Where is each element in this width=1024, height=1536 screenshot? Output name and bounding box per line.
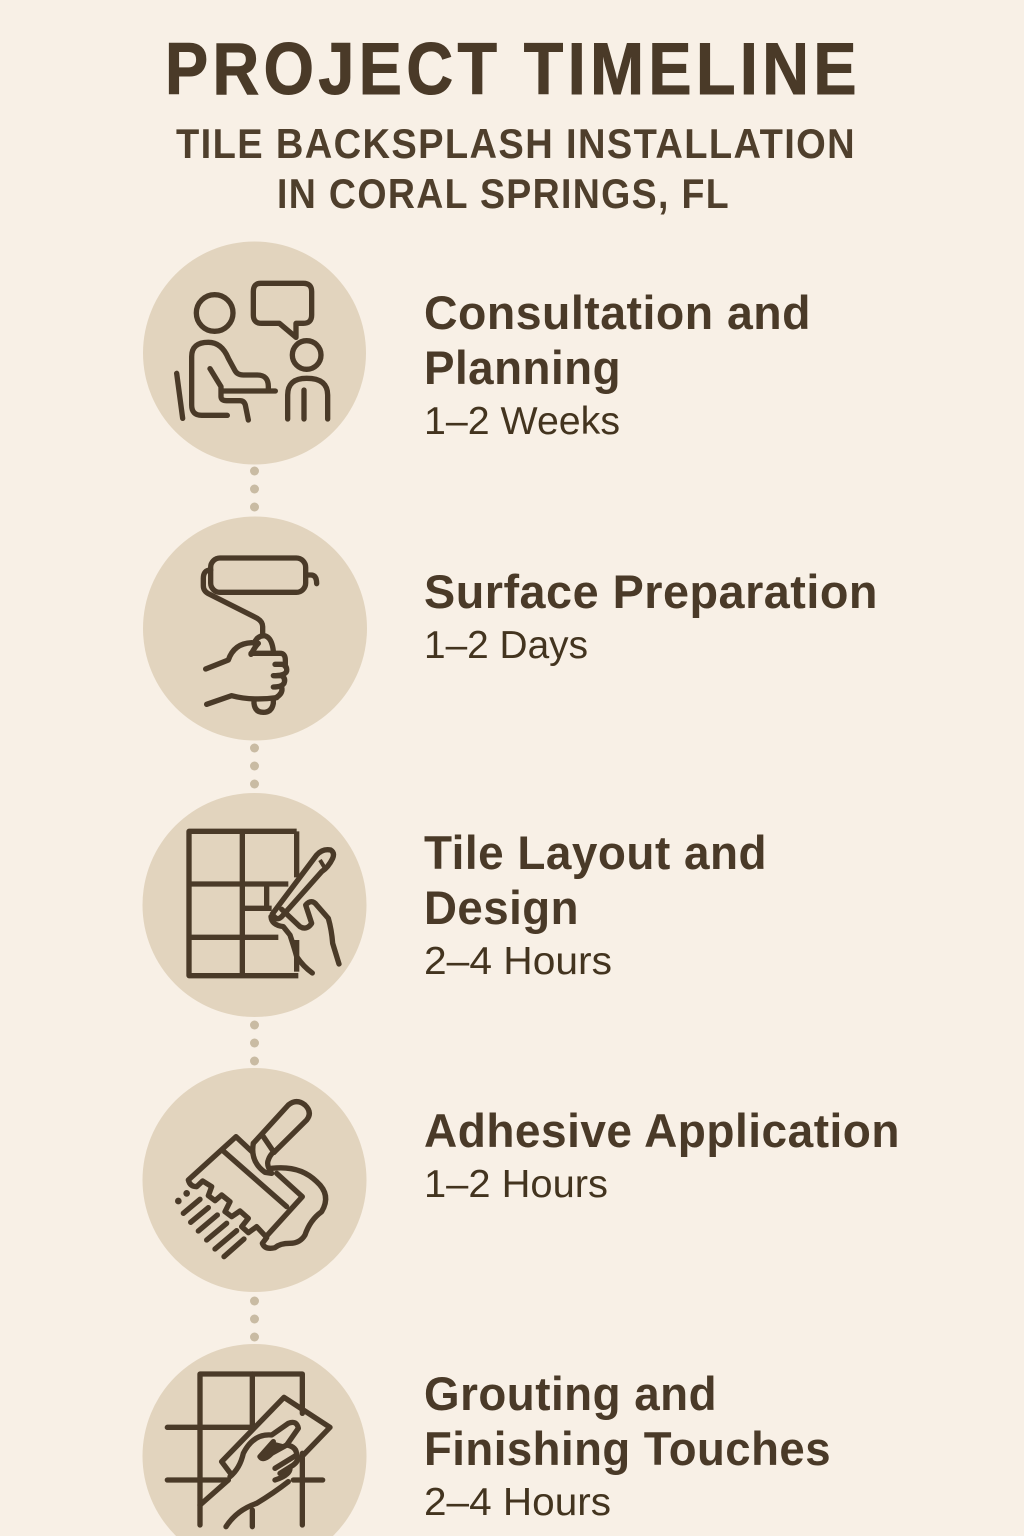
connector dots 3 [250,1020,259,1066]
step 3: tile layout and design [142,793,767,1017]
duration: 1–2 hours: 1–2 Hours [424,1163,608,1206]
duration: 1–2 weeks: 1–2 Weeks [424,400,620,443]
subtitle: TILE BACKSPLASH INSTALLATION [176,120,856,167]
step 1: consultation and planning [143,242,811,464]
heading: tile layout and design [424,826,767,934]
heading: adhesive application: Adhesive Application [424,1104,900,1157]
subtitle [176,120,856,217]
step 2: surface preparation [143,516,878,740]
step 4: adhesive application [142,1068,900,1292]
icon circle: tile grid and pencil [142,793,366,1017]
heading: consultation and planning: Planning [424,341,621,394]
connector dots 4 [250,1296,259,1342]
heading: tile layout and design: Tile Layout and [424,826,767,879]
icon circle: hand wiping tiles with float [142,1344,366,1536]
heading: grouting and finishing touches: Finishing Touches [424,1422,831,1475]
heading: consultation and planning [424,286,811,394]
duration: 2–4 hours: 2–4 Hours [424,940,612,983]
connector dots 1 [250,466,259,512]
icon circle: notched trowel with adhesive [142,1068,366,1292]
title: PROJECT TIMELINE [165,29,861,110]
duration: 2–4 hours: 2–4 Hours [424,1481,611,1524]
heading: consultation and planning: Consultation and [424,286,811,339]
duration: 1–2 days: 1–2 Days [424,624,588,667]
subtitle: IN CORAL SPRINGS, FL [277,170,730,217]
icon circle: consultation [143,242,366,464]
connector dots 2 [250,744,259,788]
heading: surface preparation: Surface Preparation [424,565,878,618]
step 5: grouting and finishing touches [142,1344,831,1536]
heading: grouting and finishing touches: Grouting and [424,1367,717,1420]
heading: grouting and finishing touches [424,1367,831,1475]
icon circle: paint roller [143,516,367,740]
heading: tile layout and design: Design [424,881,579,934]
